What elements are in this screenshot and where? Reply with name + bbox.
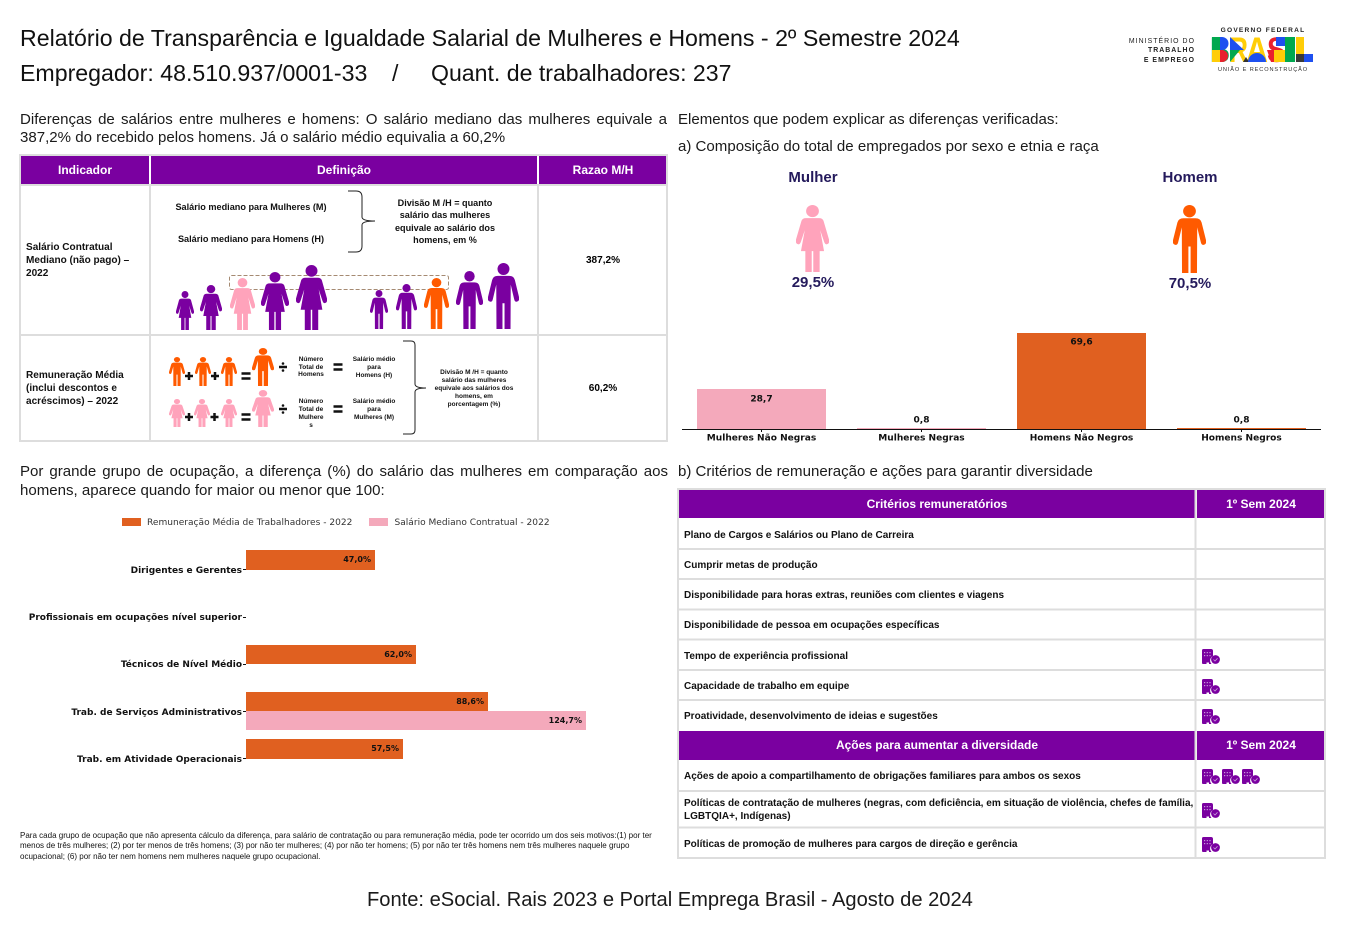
bar chart: difference by occupation group: 62,0%: [384, 650, 412, 659]
icons: company markers: [1202, 649, 1260, 852]
criteria rows: Disponibilidade de pessoa em ocupações específicas: [684, 620, 940, 631]
icon: man: [1173, 205, 1206, 273]
diagram: median salary definition: Divisão M /H = quanto: [398, 198, 493, 208]
logo: Ministério do Trabalho e Emprego: [1129, 36, 1195, 64]
chart legend: [122, 517, 550, 528]
diagram: average pay definition: Homens: [298, 371, 324, 378]
diagram: median salary definition: equivale ao salário dos: [395, 223, 495, 233]
table: salary ratio: [20, 155, 667, 441]
criteria rows: Cumprir metas de produção: [684, 560, 818, 571]
footnote: ocupacional; (6) por não ter nem homens nem mulheres naquele grupo ocupacional.: [20, 852, 320, 861]
bar chart: employees by sex and race: Homens Não Negros: [1030, 434, 1133, 444]
title line 1: Relatório de Transparência e Igualdade Salarial de Mulheres e Homens - 2º Semestre 2024: [20, 25, 960, 51]
diversity action rows: Políticas de promoção de mulheres para cargos de direção e gerência: [684, 839, 1018, 850]
header: criteria: [679, 490, 1324, 518]
bar chart: employees by sex and race: 0,8: [1233, 416, 1250, 426]
header: diversity actions: 1º Sem 2024: [1226, 738, 1296, 752]
panel: composition by sex: [788, 169, 1218, 292]
row label: average pay: acréscimos) – 2022: [26, 396, 119, 407]
row label: average pay: (inclui descontos e: [26, 383, 117, 394]
diagram: average pay definition: [169, 341, 514, 434]
source line: Fonte: eSocial. Rais 2023 e Portal Emprega Brasil - Agosto de 2024: [367, 889, 973, 911]
logo: Governo Federal Brasil: [1210, 27, 1313, 73]
text: occupation group difference: Por grande grupo de ocupação, a diferença (%) do salário das mulheres em comparação aos homens, aparece quando for maior ou menor que 100:: [20, 463, 668, 499]
bar chart: employees by sex and race: Homens Negros: [1201, 434, 1282, 444]
diagram: average pay definition: para: [367, 364, 381, 371]
criteria rows: Proatividade, desenvolvimento de ideias e sugestões: [684, 711, 938, 722]
header: diversity actions: [679, 731, 1324, 760]
value: 70,5%: 70,5%: [1169, 275, 1211, 292]
diagram: median salary definition: salário das mulheres: [400, 210, 490, 220]
logo: Governo Federal Brasil: B: [1210, 31, 1230, 70]
icon: woman: [796, 205, 829, 272]
logo: Governo Federal Brasil: R: [1229, 31, 1248, 70]
table header row: [21, 156, 666, 184]
header: criteria: Critérios remuneratórios: [867, 497, 1008, 511]
footnote: menos de três mulheres; (2) por ter menos de três homens; (3) por não ter mulheres; (4) por não ter homens; (5) por não ter três homens nem três mulheres naquele grupo: [20, 841, 629, 850]
logo: Governo Federal Brasil: UNIÃO E RECONSTRUÇÃO: [1218, 66, 1308, 73]
diagram: median salary definition: homens, em %: [413, 235, 477, 245]
diagram: average pay definition: homens, em: [455, 393, 493, 400]
label: Mulher: Mulher: [788, 169, 838, 186]
logo: Governo Federal Brasil: GOVERNO FEDERAL: [1221, 27, 1305, 34]
diagram: average pay definition: Número: [299, 398, 323, 405]
bar chart: employees by sex and race: Mulheres Não Negras: [707, 434, 816, 444]
value: 29,5%: 29,5%: [792, 274, 834, 291]
bar chart: employees by sex and race: 69,6: [1070, 338, 1093, 348]
diagram: average pay definition: para: [367, 406, 381, 413]
table header row: Indicador: [58, 163, 112, 177]
value: 60,2%: 60,2%: [589, 383, 617, 394]
header: diversity actions: Ações para aumentar a diversidade: [836, 738, 1038, 752]
diagram: median salary definition: [175, 191, 519, 330]
diagram: average pay definition: equivale aos salários dos: [435, 385, 514, 392]
header: criteria: 1º Sem 2024: [1226, 497, 1296, 511]
criteria rows: [684, 530, 1004, 722]
bar chart: difference by occupation group: Trab. de Serviços Administrativos: [71, 708, 242, 718]
bar chart: difference by occupation group: 124,7%: [549, 716, 582, 725]
diversity action rows: LGBTQIA+, Indígenas): [684, 811, 791, 822]
footnote: Para cada grupo de ocupação que não apresenta cálculo da diferença, para salário de contratação ou para remuneração média, pode ter ocorrido um dos seis motivos:(1) por ter: [20, 831, 652, 840]
logo: Ministério do Trabalho e Emprego: TRABALHO: [1148, 47, 1195, 54]
criteria rows: Disponibilidade para horas extras, reuniões com clientes e viagens: [684, 590, 1004, 601]
criteria rows: Tempo de experiência profissional: [684, 651, 848, 662]
diagram: average pay definition: Homens (H): [356, 372, 392, 379]
table header row: Definição: [317, 163, 371, 177]
diagram: average pay definition: Total de: [299, 364, 324, 371]
bar chart: difference by occupation group: Trab. em Atividade Operacionais: [77, 755, 242, 765]
bar chart: difference by occupation group: 57,5%: [371, 744, 399, 753]
footnote: [20, 831, 652, 861]
table header row: Razao M/H: [573, 163, 633, 177]
diagram: average pay definition: Mulheres (M): [354, 414, 394, 421]
bar chart: difference by occupation group: Dirigentes e Gerentes: [131, 566, 242, 576]
diagram: average pay definition: salário das mulheres: [442, 377, 507, 384]
diagram: average pay definition: Total de: [299, 406, 324, 413]
text: explanatory elements heading: Elementos que podem explicar as diferenças verificadas:: [678, 111, 1059, 128]
bar chart: employees by sex and race: 0,8: [913, 416, 930, 426]
diagram: average pay definition: Salário médio: [353, 398, 395, 405]
row label: contractual median: Mediano (não pago) –: [26, 255, 130, 266]
diagram: average pay definition: Divisão M /H = quanto: [440, 369, 508, 376]
bar chart: difference by occupation group: Profissionais em ocupações nível superior: [29, 613, 243, 623]
logo: Governo Federal Brasil: L: [1294, 31, 1313, 70]
text: section b heading: b) Critérios de remuneração e ações para garantir diversidade: [678, 463, 1093, 480]
diagram: average pay definition: Número: [299, 356, 323, 363]
row label: average pay: Remuneração Média: [26, 370, 124, 381]
logo: Ministério do Trabalho e Emprego: E EMPREGO: [1144, 57, 1195, 64]
row label: contractual median: 2022: [26, 268, 49, 279]
chart legend: Remuneração Média de Trabalhadores - 2022: [147, 517, 352, 528]
bar chart: difference by occupation group: 88,6%: [456, 697, 484, 706]
diagram: median salary definition: Salário mediano para Homens (H): [178, 234, 324, 244]
logo: Governo Federal Brasil: S: [1267, 31, 1286, 70]
diversity action rows: [684, 771, 1194, 850]
diagram: average pay definition: porcentagem (%): [448, 401, 500, 408]
logo: Governo Federal Brasil: I: [1284, 31, 1296, 70]
title line 2: separator: /: [392, 60, 398, 86]
diagram: average pay definition: s: [309, 422, 313, 429]
logo: Ministério do Trabalho e Emprego: MINISTÉRIO DO: [1129, 36, 1195, 45]
criteria rows: Plano de Cargos e Salários ou Plano de Carreira: [684, 530, 914, 541]
bar chart: employees by sex and race: [682, 333, 1321, 444]
row label: contractual median: [26, 242, 130, 279]
bar chart: employees by sex and race: 28,7: [750, 394, 773, 404]
text: section a heading: a) Composição do total de empregados por sexo e etnia e raça: [678, 138, 1099, 155]
bar chart: difference by occupation group: [29, 550, 586, 765]
title line 2: employer: Empregador: 48.510.937/0001-33: [20, 60, 367, 86]
logo: Governo Federal Brasil: A: [1246, 31, 1268, 70]
diagram: average pay definition: Salário médio: [353, 356, 395, 363]
row label: average pay: [26, 370, 124, 407]
title line 2: workers: Quant. de trabalhadores: 237: [431, 60, 731, 86]
label: Homem: Homem: [1162, 169, 1218, 186]
criteria rows: Capacidade de trabalho em equipe: [684, 681, 850, 692]
value: 387,2%: 387,2%: [586, 255, 620, 266]
diagram: average pay definition: Mulhere: [299, 414, 324, 421]
bar chart: employees by sex and race: Mulheres Negras: [878, 434, 965, 444]
text: salary differences summary: Diferenças de salários entre mulheres e homens: O salário mediano das mulheres equivale a 387,2% do recebido pelos homens. Já o salário médio equivalia a 60,2%: [20, 111, 667, 146]
bar chart: difference by occupation group: Técnicos de Nível Médio: [121, 659, 242, 670]
diagram: median salary definition: Salário mediano para Mulheres (M): [175, 202, 327, 212]
table: remuneration criteria and diversity actions: [678, 489, 1325, 858]
bar chart: difference by occupation group: 47,0%: [343, 555, 371, 564]
chart legend: Salário Mediano Contratual - 2022: [394, 518, 550, 528]
row label: contractual median: Salário Contratual: [26, 242, 113, 253]
diversity action rows: Ações de apoio a compartilhamento de obrigações familiares para ambos os sexos: [684, 771, 1081, 782]
diversity action rows: Políticas de contratação de mulheres (negras, com deficiência, em situação de violência, chefes de família,: [684, 798, 1194, 809]
